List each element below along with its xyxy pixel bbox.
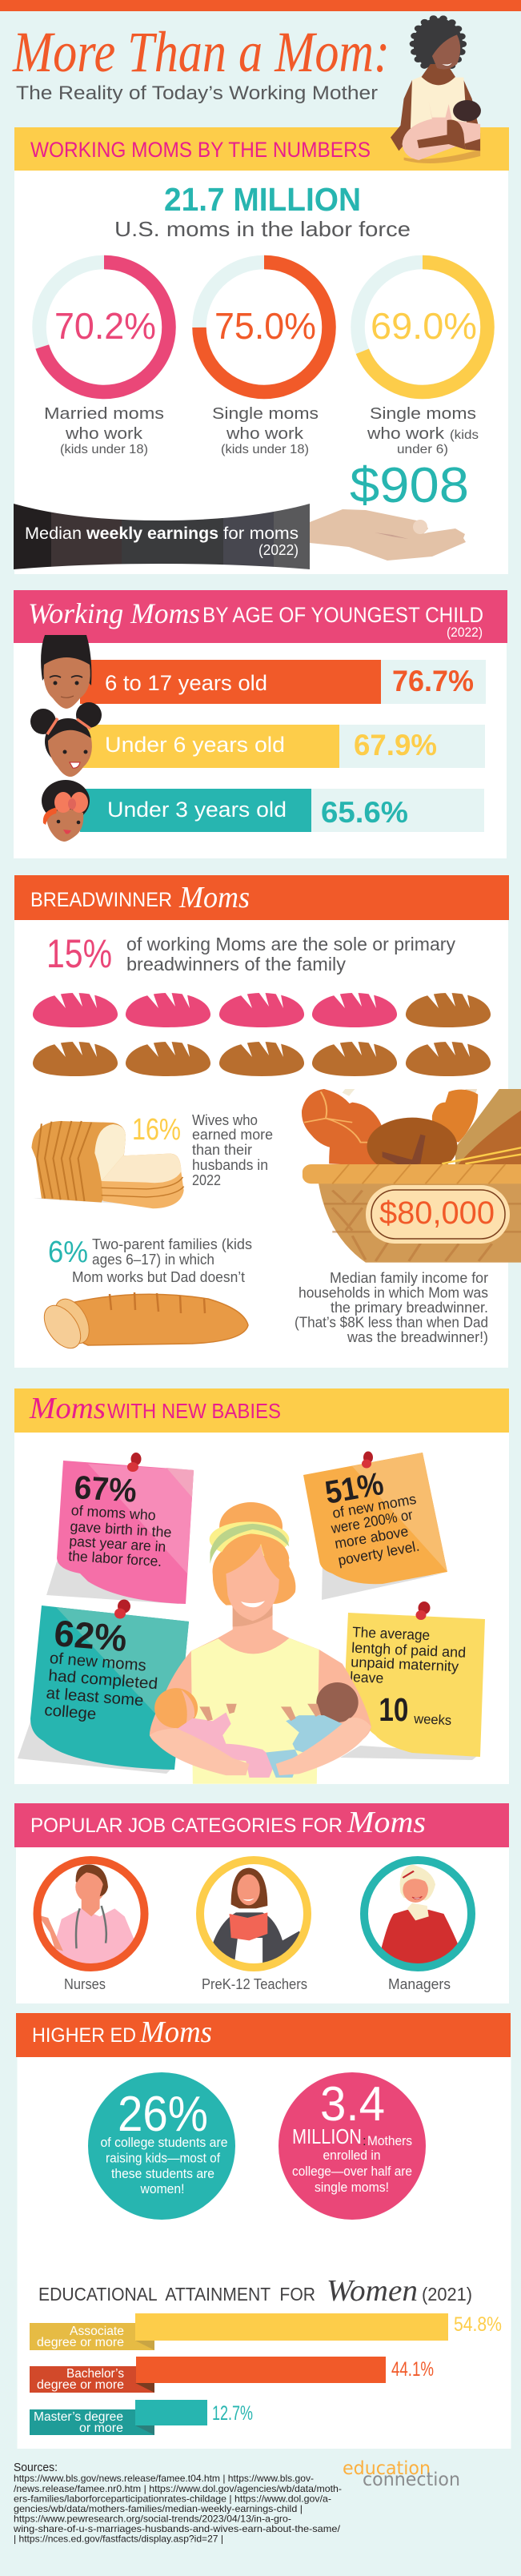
badge: $80,000: $80,000 [379, 1196, 495, 1231]
sources: wing-share-of-u-s-marriages-husbands-and-wives-earn-about-the-same/ [13, 2523, 341, 2534]
note: 62% teal: 62% [53, 1612, 129, 1659]
bar: 6 to 17 years old: 6 to 17 years old [105, 671, 267, 695]
sources: | https://nces.ed.gov/fastfacts/display.asp?id=27 | [14, 2534, 223, 2545]
note: 62% teal [18, 1600, 189, 1774]
header: moms with new babies [14, 1388, 509, 1433]
stat: 15%: of working Moms are the sole or primary [126, 934, 455, 954]
donut: single moms 69.0%: who work [367, 424, 445, 443]
heading: educational attainment [38, 2274, 472, 2308]
note: 10 weeks yellow: weeks [413, 1711, 452, 1728]
stat: 6% two-parent families: Mom works but Dad doesn’t [72, 1269, 245, 1285]
header: popular job categories [14, 1803, 509, 1847]
sources: https://www.bls.gov/news.release/famee.t04.htm | https://www.bls.gov- [14, 2473, 314, 2484]
bar: under 6 years old: Under 6 years old [105, 733, 285, 757]
title: More Than a Mom: [12, 20, 390, 84]
icon: older child face [41, 635, 91, 709]
donut: single moms 69.0% [358, 263, 487, 456]
stat: 16% wives [132, 1112, 273, 1188]
icon: baguette [37, 1292, 248, 1355]
bar: bachelor's degree 44.1%: degree or more [37, 2378, 124, 2392]
banner: median weekly earnings: weekly earnings [86, 524, 218, 543]
stat circle: 3.4 million: enrolled in [323, 2148, 381, 2163]
sources: ers-families/laborforceparticipationrates-childage | https://www.dol.gov/a- [14, 2494, 331, 2505]
sources: /news.release/famee.nr0.htm | https://www.dol.gov/agencies/wb/data/moth- [14, 2483, 342, 2494]
sources [13, 2461, 342, 2545]
bar: bachelor's degree 44.1% [30, 2357, 434, 2393]
donut: single moms 69.0%: 69.0% [371, 305, 477, 347]
note: 10 weeks yellow: The average [352, 1624, 431, 1643]
donut: married moms 70.2%: Married moms [44, 404, 164, 423]
header: working moms [14, 127, 509, 171]
header: by age of youngest child [14, 590, 507, 643]
job: nurses [37, 1860, 144, 1992]
banner: median weekly earnings: (2022) [258, 542, 299, 558]
stat circle: 26%: 26% [118, 2087, 208, 2142]
text: median family income: Median family income for [330, 1270, 488, 1286]
donut: married moms 70.2%: (kids under 18) [60, 443, 148, 456]
note: 10 weeks yellow: lentgh of paid and [351, 1640, 467, 1661]
bar: 6 to 17 years old: 76.7% [392, 665, 474, 697]
donut: single moms 69.0%: (kids [450, 428, 479, 442]
stat: 16% wives: earned more [192, 1127, 273, 1143]
stat: 16% wives: husbands in [192, 1157, 268, 1173]
bar: bachelor's degree 44.1%: 44.1% [391, 2358, 434, 2381]
stat: 6% two-parent families: ages 6–17) in which [92, 1252, 214, 1268]
stat: 15%: 15% [46, 931, 112, 976]
text: median family income [295, 1270, 488, 1345]
icon: sliced bread [31, 1121, 184, 1208]
note: 67% pink: 67% [73, 1469, 138, 1509]
donut: single moms 75.0%: (kids under 18) [221, 443, 309, 456]
note: 10 weeks yellow: unpaid maternity [351, 1654, 459, 1674]
panel: working moms by the numbers [14, 18, 509, 574]
donut: single moms 75.0%: Single moms [212, 404, 319, 423]
stat: 21.7 million: 21.7 MILLION [164, 181, 361, 218]
note: 67% pink: gave birth in the [70, 1518, 172, 1541]
stat: 16% wives: 2022 [192, 1172, 221, 1188]
header: breadwinner moms: BREADWINNER [30, 889, 172, 911]
logo: education connection: education [343, 2458, 431, 2479]
note: 62% teal: had completed [48, 1667, 158, 1693]
donut: single moms 69.0%: Single moms [370, 404, 476, 423]
bar: under 6 years old: 67.9% [354, 729, 437, 762]
stat: 6% two-parent families: Two-parent families (kids [92, 1236, 252, 1252]
stat: $908: $908 [350, 458, 469, 513]
note: 62% teal: at least some [46, 1685, 144, 1710]
stat circle: 3.4 million: MILLION [292, 2124, 362, 2148]
bar: bachelor's degree 44.1%: Bachelor’s [66, 2367, 124, 2381]
stat circle: 3.4 million: 3.4 [320, 2077, 385, 2131]
stat: 16% wives: 16% [132, 1113, 181, 1147]
donut: married moms 70.2%: who work [65, 424, 143, 443]
heading: educational attainment: Women [327, 2274, 418, 2308]
sources: https://www.pewresearch.org/social-trends/2023/04/13/in-a-gro- [14, 2513, 291, 2524]
donut: single moms 69.0%: under 6) [397, 443, 448, 456]
donut: single moms 75.0%: 75.0% [214, 305, 316, 347]
stat: 15%: breadwinners of the family [126, 954, 347, 975]
job: teachers [200, 1860, 307, 1992]
header: by age of youngest child: Working Moms [28, 597, 200, 629]
icon: open hand [310, 509, 466, 561]
header: moms with new babies: Moms [29, 1392, 106, 1425]
panel: moms with new babies [14, 1388, 509, 1784]
donut: single moms 75.0%: who work [226, 424, 304, 443]
stat circle: 26%: these students are [111, 2167, 214, 2181]
banner: median weekly earnings: Median [25, 524, 82, 543]
job: teachers: PreK-12 Teachers [202, 1976, 307, 1992]
bar: master's degree 12.7%: or more [79, 2421, 123, 2435]
heading: educational attainment: EDUCATIONAL ATTAINMENT FOR [38, 2284, 315, 2305]
stat: 21.7 million [114, 181, 411, 241]
note: 51% orange [303, 1451, 447, 1600]
top band [0, 0, 521, 11]
header: moms with new babies: WITH NEW BABIES [107, 1399, 281, 1423]
stat: 6% two-parent families [48, 1236, 252, 1285]
banner: median weekly earnings [14, 500, 310, 573]
basket of bread illustration [302, 1089, 521, 1263]
note: 67% pink: the labor force. [68, 1548, 162, 1569]
header: breadwinner moms: Moms [178, 881, 250, 914]
stat circle: 3.4 million [279, 2072, 426, 2220]
note: 51% orange: of new moms [331, 1491, 418, 1521]
note: 67% pink: past year are in [69, 1533, 166, 1555]
bar: under 6 years old [80, 725, 485, 768]
header: higher ed moms: HIGHER ED [32, 2024, 136, 2047]
note: 10 weeks yellow [340, 1601, 485, 1760]
bar: master's degree 12.7% [30, 2400, 253, 2435]
header: higher ed moms [16, 2013, 511, 2057]
stat: 21.7 million: U.S. moms in the labor force [114, 217, 411, 241]
note: 67% pink [46, 1453, 194, 1604]
header: by age of youngest child: BY AGE OF YOUNGEST CHILD [202, 603, 483, 627]
subtitle: The Reality of Today’s Working Mother [16, 82, 378, 104]
panel: by age of youngest child [14, 590, 507, 858]
stat circle: 26% [88, 2072, 235, 2220]
header: working moms: WORKING MOMS BY THE NUMBERS [30, 138, 371, 162]
header: breadwinner moms [14, 875, 509, 920]
donut: married moms 70.2% [39, 263, 169, 456]
bar: under 3 years old [80, 789, 484, 832]
banner: median weekly earnings: for moms [223, 524, 299, 543]
bar: associate degree 54.8%: Associate [70, 2325, 124, 2338]
note: 62% teal: college [44, 1702, 97, 1723]
stat: 16% wives: Wives who [192, 1112, 258, 1128]
text: median family income: was the breadwinner!) [347, 1329, 488, 1345]
job: managers: Managers [388, 1976, 451, 1992]
job: nurses: Nurses [64, 1976, 106, 1992]
stat: 6% two-parent families: 6% [48, 1236, 88, 1269]
sources: Sources: [14, 2461, 58, 2474]
stat circle: 26%: raising kids—most of [106, 2151, 220, 2165]
note: 51% orange: more above [334, 1523, 410, 1552]
header: popular job categories: POPULAR JOB CATEGORIES FOR [30, 1814, 343, 1837]
note: 10 weeks yellow: leave [350, 1669, 384, 1686]
bar: under 3 years old: Under 3 years old [107, 798, 287, 822]
stat circle: 3.4 million: Mothers [367, 2134, 412, 2148]
panel: higher ed moms [16, 2013, 511, 2449]
stat: 16% wives: than their [192, 1142, 252, 1158]
stat circle: 26%: women! [140, 2182, 184, 2196]
breads: 15 percent pictogram [33, 991, 491, 1076]
logo: education connection [343, 2458, 460, 2490]
note: 51% orange: 51% [323, 1466, 386, 1511]
illustration: mother with twin babies [150, 1502, 371, 1784]
bar: master's degree 12.7%: Master’s degree [34, 2410, 123, 2424]
header: popular job categories: Moms [347, 1806, 426, 1839]
bar: associate degree 54.8% [30, 2313, 502, 2350]
text: median family income: the primary breadwinner. [331, 1300, 488, 1316]
badge: $80,000 [366, 1185, 510, 1244]
text: median family income: (That’s $8K less than when Dad [295, 1315, 488, 1331]
bar: associate degree 54.8%: 54.8% [454, 2313, 502, 2336]
header: by age of youngest child: (2022) [447, 625, 483, 640]
donut: married moms 70.2%: 70.2% [54, 305, 156, 347]
stat circle: 3.4 million: : [363, 2134, 367, 2148]
panel: breadwinner moms [14, 875, 521, 1368]
job: managers [364, 1860, 471, 1992]
bar: master's degree 12.7%: 12.7% [212, 2402, 253, 2425]
note: 10 weeks yellow: 10 [379, 1691, 408, 1728]
stat: 15% [46, 931, 455, 976]
stat circle: 3.4 million: single moms! [315, 2180, 389, 2195]
logo: education connection: connection [363, 2470, 460, 2490]
panel: popular job categories [14, 1803, 509, 2003]
icon: baby with bow face [42, 780, 90, 842]
illustration: mother holding baby [391, 18, 481, 163]
stat circle: 3.4 million: college—over half are [292, 2164, 412, 2179]
sources: gencies/wb/data/mothers-families/median-weekly-earnings-child | [14, 2503, 303, 2514]
note: 62% teal: of new moms [49, 1650, 146, 1674]
bar: associate degree 54.8%: degree or more [37, 2336, 124, 2349]
note: 67% pink: of moms who [70, 1502, 156, 1523]
text: median family income: households in which Mom was [299, 1284, 488, 1300]
stat circle: 26%: of college students are [101, 2136, 227, 2150]
donut: single moms 75.0% [199, 263, 329, 456]
header: higher ed moms: Moms [139, 2015, 212, 2049]
bar: under 3 years old: 65.6% [321, 796, 408, 829]
note: 51% orange: poverty level. [337, 1537, 421, 1569]
bar: 6 to 17 years old [80, 660, 486, 704]
icon: girl with puffs face [30, 702, 102, 777]
note: 51% orange: were 200% or [329, 1506, 414, 1537]
heading: educational attainment: (2021) [422, 2284, 472, 2305]
